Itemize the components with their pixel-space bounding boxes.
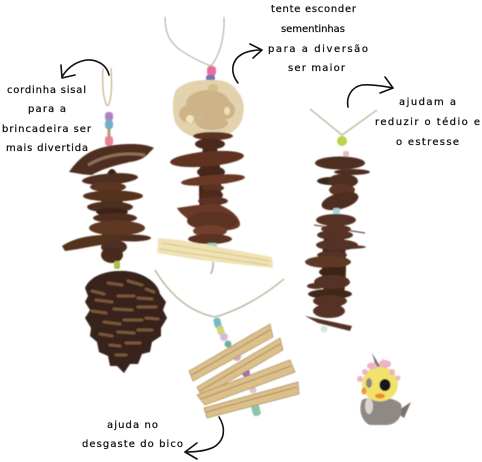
beads (206, 66, 216, 81)
string (155, 270, 284, 317)
text: sisal cord: mais divertida (6, 143, 88, 154)
upper slices (315, 156, 370, 214)
beads (105, 112, 113, 146)
toy: left hanging wood slices with pine cone (62, 68, 167, 373)
text: hide seeds: para a diversão (268, 44, 368, 55)
loofah (173, 80, 244, 139)
string (310, 109, 377, 135)
flat stick (157, 238, 273, 268)
loofah texture (179, 84, 235, 130)
text: hide seeds: sementinhas (281, 24, 345, 35)
toy: lower hanging bamboo sticks (155, 270, 299, 418)
beads (213, 317, 261, 417)
pine cone (85, 271, 167, 373)
eye (380, 379, 390, 391)
tail (396, 402, 411, 418)
beak (375, 394, 385, 398)
text: sisal cord: para a (28, 104, 66, 115)
blue bead (333, 208, 340, 216)
text: reduces boredom: ajudam a (399, 97, 456, 108)
arrow: to sisal cord (61, 60, 109, 78)
arrow: to beak note (185, 417, 223, 459)
yellow bead (337, 136, 347, 146)
text: reduces boredom (375, 97, 480, 148)
crest (372, 353, 383, 368)
text: reduces boredom: reduzir o tédio e (375, 116, 480, 128)
white bead (320, 326, 328, 332)
text: sisal cord (2, 85, 92, 154)
wing (365, 398, 373, 414)
text: sisal cord: brincadeira ser (2, 124, 92, 135)
text: beak wear: ajuda no (107, 420, 158, 431)
wood slices (62, 144, 154, 263)
arrow: to right note (348, 77, 393, 107)
far eye (366, 378, 372, 388)
body (360, 397, 402, 425)
string (165, 17, 224, 66)
text: beak wear: desgaste do bico (82, 439, 183, 450)
green connector bead (114, 261, 120, 269)
text: hide seeds (268, 4, 368, 74)
bamboo sticks (189, 324, 299, 418)
toy: centre hanging loofah and wood slices (157, 17, 273, 274)
text: reduces boredom: o estresse (396, 137, 459, 148)
cheek (362, 388, 366, 394)
toy: right hanging wood slices (305, 109, 377, 332)
arrow: to loofah (233, 44, 262, 83)
text: hide seeds: tente esconder (271, 4, 357, 15)
text: hide seeds: ser maior (288, 63, 346, 74)
lower slices (305, 214, 366, 331)
text: beak wear (82, 420, 183, 450)
sisal loop (103, 68, 112, 106)
pink bead (343, 151, 349, 157)
wood slices (169, 132, 245, 244)
green connector bead (207, 243, 217, 248)
text: sisal cord: cordinha sisal (7, 85, 86, 96)
illustration: cockatiel mascot (357, 353, 411, 425)
head (362, 366, 398, 402)
string tail (211, 262, 213, 274)
pink bow and hearts (357, 360, 400, 382)
